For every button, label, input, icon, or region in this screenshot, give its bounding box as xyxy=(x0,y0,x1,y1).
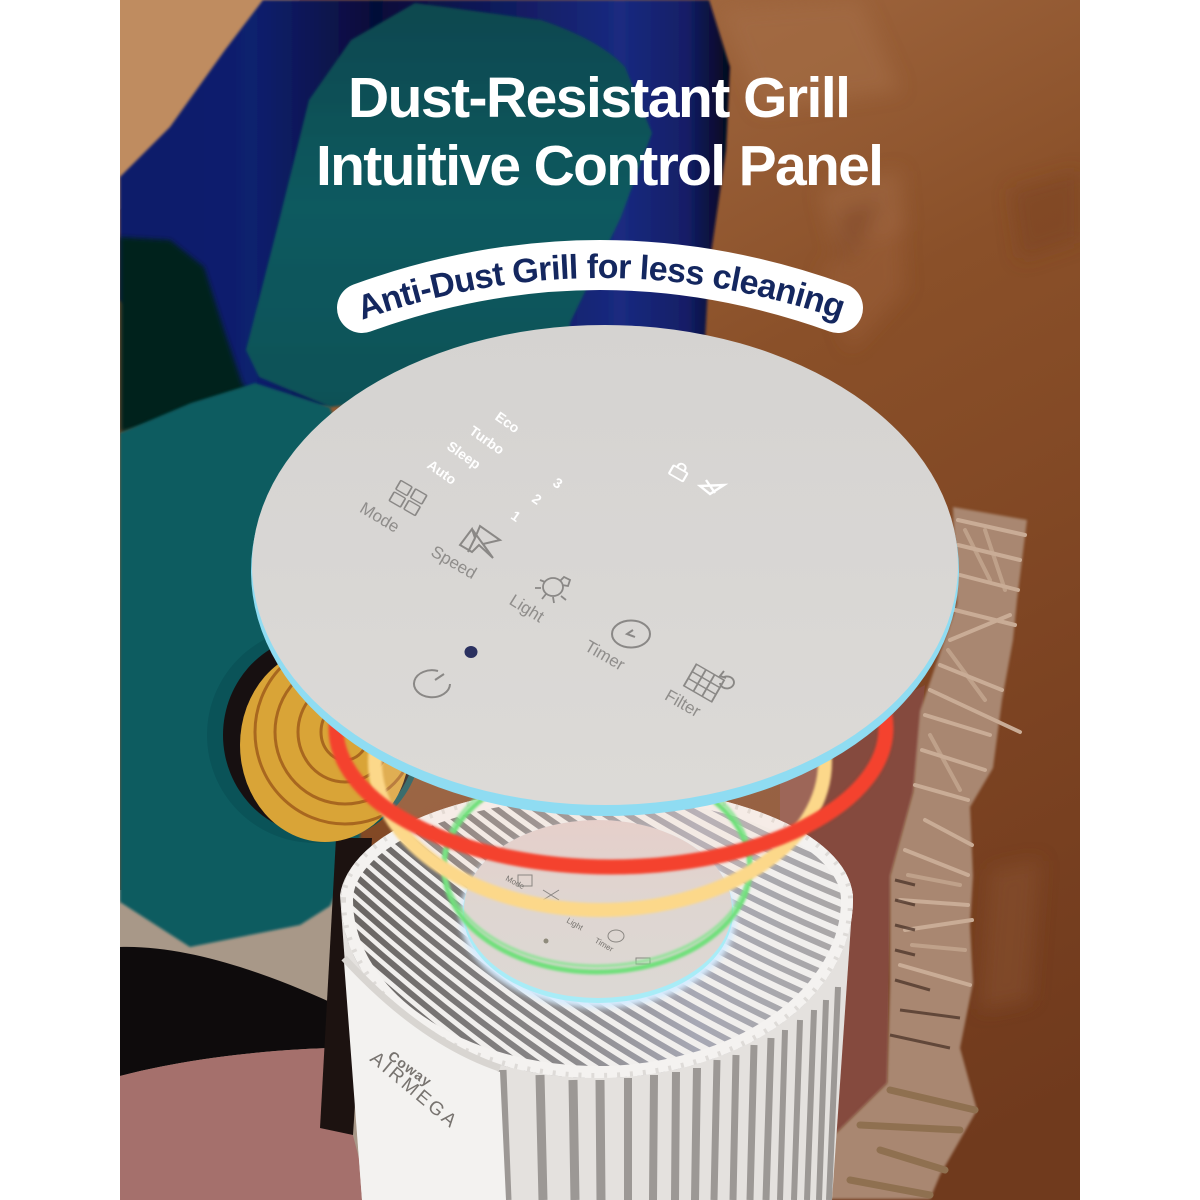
label: Sleep: Sleep xyxy=(444,438,484,472)
disc labels: Timer xyxy=(593,936,615,954)
indicator LED xyxy=(464,646,478,658)
title line 2: Intuitive Control Panel xyxy=(316,134,884,198)
top grill base xyxy=(350,800,853,1066)
icon: lock xyxy=(669,460,690,482)
icon: mode xyxy=(389,480,427,516)
icon: power xyxy=(414,670,450,697)
chair: leg xyxy=(320,838,372,1135)
label: Filter: Filter xyxy=(662,686,704,721)
rug: fringe xyxy=(825,507,1027,1199)
label: Light: Light xyxy=(506,591,548,626)
disc labels: Mode xyxy=(504,874,526,891)
light ring: yellow xyxy=(366,752,834,918)
icon: filter xyxy=(684,664,724,702)
disc labels: Light xyxy=(565,916,585,933)
logo: AIRMEGA: AIRMEGA xyxy=(366,1048,462,1134)
label: Mode: Mode xyxy=(357,498,403,537)
panel glow edge xyxy=(251,532,959,816)
label: Auto: Auto xyxy=(424,456,460,488)
vertical fins xyxy=(502,987,838,1200)
logo: Coway: Coway xyxy=(385,1047,435,1090)
label: 2: 2 xyxy=(529,490,545,508)
purifier body xyxy=(340,799,853,1200)
translucent glow between rings xyxy=(381,761,818,876)
label: Turbo: Turbo xyxy=(467,422,507,458)
photo background xyxy=(120,0,1080,1200)
icon: fan xyxy=(460,526,500,558)
rug: left floor rug xyxy=(120,890,370,1200)
icon: bulb xyxy=(535,577,570,603)
infographic scene xyxy=(120,0,1080,1200)
icon: mute xyxy=(700,480,724,494)
label: Timer: Timer xyxy=(581,637,628,675)
title line 1: Dust-Resistant Grill xyxy=(348,66,851,130)
grill fins xyxy=(341,800,853,1078)
chair: teal seat xyxy=(120,383,360,947)
chair: teal back cushion xyxy=(246,3,652,407)
real purifier control disc xyxy=(460,820,736,1008)
rug: right rug body xyxy=(780,685,925,1200)
disc labels xyxy=(504,874,650,964)
curved callout: anti-dust grill: Anti-Dust Grill for less cleaning xyxy=(362,253,844,324)
grill rim xyxy=(341,786,853,1078)
chair: blue back xyxy=(120,0,730,420)
panel face xyxy=(252,325,958,805)
label: 1: 1 xyxy=(508,507,524,525)
chair: dark side shadow xyxy=(120,237,255,433)
icon: filter reset xyxy=(720,671,734,688)
wood floor xyxy=(120,0,1080,1200)
icon: timer xyxy=(612,620,650,648)
title xyxy=(316,66,884,198)
label: Speed: Speed xyxy=(428,542,480,583)
floating control panel xyxy=(251,325,959,816)
front logo panel xyxy=(344,958,506,1200)
label: 3: 3 xyxy=(550,474,566,492)
light ring: red xyxy=(327,713,895,876)
chair: round side cushion xyxy=(207,640,414,843)
body shell xyxy=(340,858,853,1200)
light ring: green xyxy=(440,798,754,976)
label: Eco: Eco xyxy=(492,408,523,436)
